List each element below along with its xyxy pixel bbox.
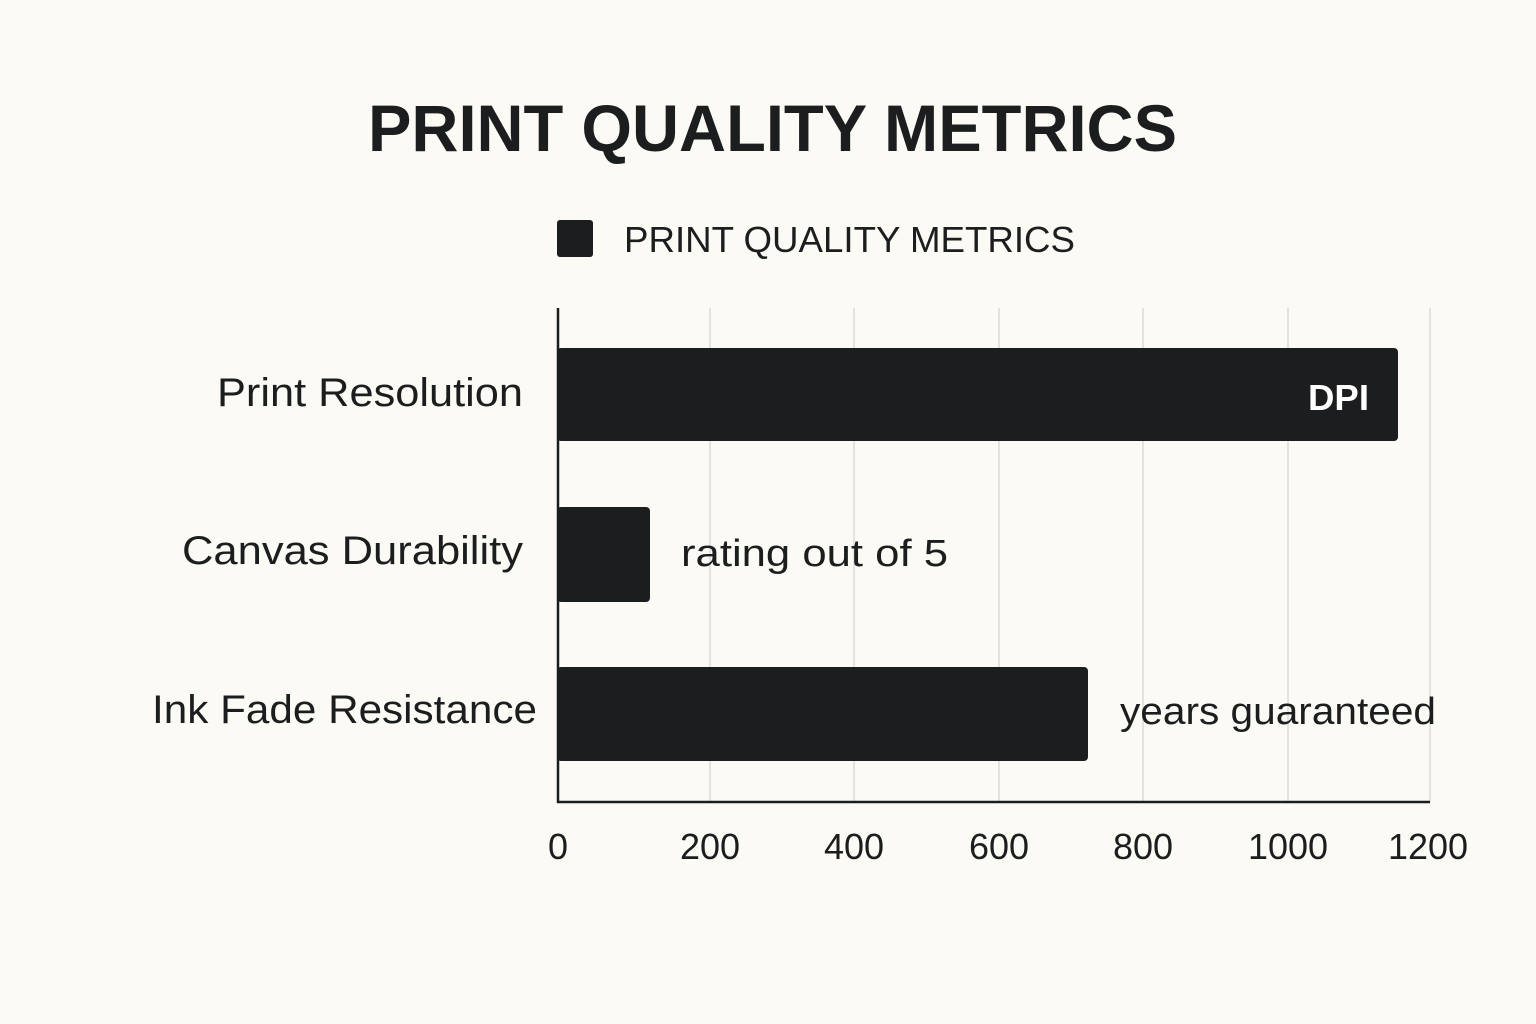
x axis tick labels: 800 bbox=[1113, 826, 1173, 867]
category labels: Canvas Durability bbox=[182, 529, 523, 573]
category labels bbox=[152, 371, 537, 732]
category labels: Print Resolution bbox=[217, 371, 523, 415]
bar chart bbox=[557, 348, 1436, 761]
bar: print resolution: DPI bbox=[1308, 377, 1369, 418]
axes bbox=[557, 308, 1430, 803]
title: PRINT QUALITY METRICS bbox=[368, 91, 1177, 165]
x axis tick labels bbox=[548, 826, 1468, 867]
x axis tick labels: 1000 bbox=[1248, 826, 1328, 867]
bar: canvas durability: rating out of 5 bbox=[681, 533, 948, 575]
legend: PRINT QUALITY METRICS bbox=[624, 219, 1075, 260]
bar: ink fade resistance bbox=[557, 667, 1436, 761]
x axis tick labels: 400 bbox=[824, 826, 884, 867]
x axis tick labels: 600 bbox=[969, 826, 1029, 867]
bar: canvas durability bbox=[557, 507, 948, 602]
bar: ink fade resistance: years guaranteed bbox=[1120, 691, 1436, 733]
bar: print resolution bbox=[557, 348, 1398, 441]
x axis tick labels: 0 bbox=[548, 826, 568, 867]
category labels: Ink Fade Resistance bbox=[152, 688, 537, 732]
x axis tick labels: 1200 bbox=[1388, 826, 1468, 867]
x axis tick labels: 200 bbox=[680, 826, 740, 867]
